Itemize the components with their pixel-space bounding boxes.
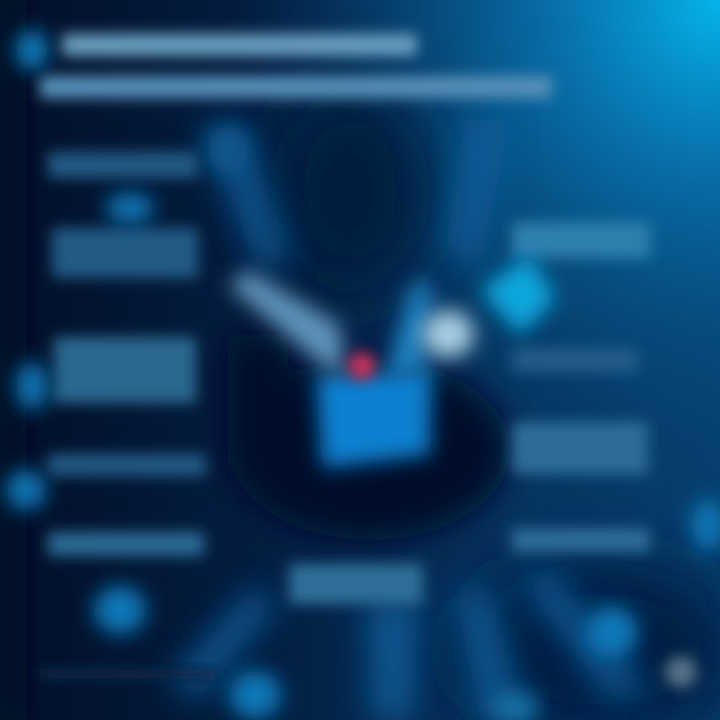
node: bottom left [94, 586, 146, 634]
right block 2 [512, 348, 638, 372]
right block 4 [512, 528, 650, 552]
node: bottom right [586, 606, 638, 658]
left arm [228, 270, 345, 375]
right block 1 [512, 222, 650, 258]
title [40, 34, 552, 98]
right block 3 [512, 422, 648, 474]
right arm [385, 280, 432, 375]
node: left lower [6, 470, 46, 510]
left block 5 [48, 532, 204, 556]
bottom centre text block [289, 564, 423, 604]
red marker [348, 352, 376, 380]
left block 2 [52, 228, 198, 278]
title line two [40, 76, 552, 98]
node: ray top [208, 126, 248, 174]
left block 3 [54, 337, 196, 403]
bright cyan burst [480, 255, 555, 335]
left block 4 [48, 454, 206, 476]
node: left middle [16, 362, 48, 410]
left block 1 [48, 152, 198, 178]
footer strip [40, 668, 215, 680]
node: bottom [229, 671, 281, 719]
left text blocks [48, 152, 206, 556]
central chart [228, 270, 474, 468]
background rays [170, 120, 650, 720]
icon: corner badge [665, 656, 697, 688]
node: upper left [106, 193, 154, 223]
title line one [62, 34, 417, 56]
icon: title badge [16, 30, 48, 70]
blue box [316, 370, 432, 468]
pale node [422, 310, 474, 358]
node: bottom ray [491, 692, 539, 720]
node: right edge [692, 499, 720, 551]
central dark halo [228, 335, 510, 540]
right text blocks [512, 222, 650, 552]
